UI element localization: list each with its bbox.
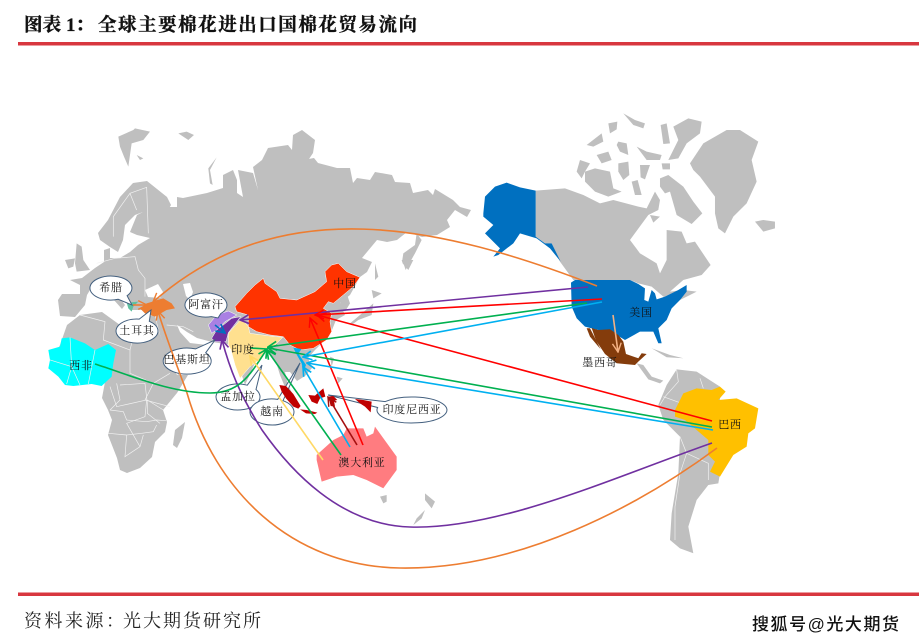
arrow: Australia to Vietnam <box>303 367 350 447</box>
arrow: Australia to Indonesia <box>328 397 357 445</box>
callouts <box>90 276 447 425</box>
label: West Africa: 西非 <box>69 358 93 372</box>
label: Greece: 希腊 <box>99 280 123 294</box>
title: 全球主要棉花进出口国棉花贸易流向 <box>98 14 417 36</box>
callout: Afghanistan <box>185 293 227 318</box>
land: Africa <box>50 312 188 473</box>
bottom red rule <box>18 592 919 596</box>
arrow: West Africa to India <box>95 349 267 393</box>
arrow: USA to Turkey <box>153 229 597 302</box>
land: Central America <box>637 363 663 383</box>
country: China <box>235 263 360 350</box>
country: Indonesia <box>279 385 372 414</box>
country: Brazil <box>675 387 758 477</box>
arrow: Brazil to Vietnam <box>307 363 713 430</box>
country: Mexico <box>587 328 647 365</box>
country labels <box>69 276 742 469</box>
land: Arctic Europe islands and Britain <box>65 128 217 272</box>
arrow: USA to India <box>268 303 587 347</box>
world map base: grey land <box>50 113 775 553</box>
title: 图表 1： <box>24 15 94 36</box>
country: Afghanistan <box>208 311 237 333</box>
watermark: 搜狐号@光大期货 <box>752 615 899 634</box>
land: Madagascar <box>173 422 185 448</box>
label: Afghanistan: 阿富汗 <box>188 297 224 311</box>
country borders <box>80 187 708 540</box>
land: North America <box>536 188 711 300</box>
arrow: Afghanistan to Pakistan <box>215 325 225 333</box>
country: Australia <box>317 427 397 488</box>
source note: 资料来源： <box>24 611 124 631</box>
sea cutouts: Black Sea and Caspian <box>145 283 193 300</box>
arrow: Australia to India <box>267 350 341 455</box>
label: China: 中国 <box>333 276 357 290</box>
land: islands and Greenland <box>577 113 775 358</box>
arrow: USA to China <box>315 299 602 315</box>
label: Mexico: 墨西哥 <box>582 355 618 369</box>
country: Turkey <box>140 298 175 317</box>
callout: Vietnam <box>250 363 300 425</box>
label: Australia: 澳大利亚 <box>338 455 386 469</box>
arrow: Brazil to Pakistan <box>222 340 712 527</box>
arrow: Australia to China <box>310 318 363 445</box>
label: Pakistan: 巴基斯坦 <box>163 352 211 366</box>
source note: 光大期货研究所 <box>123 611 261 631</box>
label: Brazil: 巴西 <box>718 418 742 431</box>
country: Vietnam <box>293 348 306 372</box>
arrow: USA to Vietnam <box>303 302 602 357</box>
country: India <box>228 318 283 378</box>
callout: Bangladesh <box>216 365 262 410</box>
arrow: Greece to Turkey <box>133 304 147 306</box>
arrow: USA to Pakistan <box>240 287 588 320</box>
label: Indonesia: 印度尼西亚 <box>382 402 442 416</box>
label: Turkey: 土耳其 <box>119 323 155 337</box>
land: South America <box>658 369 720 553</box>
label: United States: 美国 <box>629 306 653 319</box>
source note <box>24 611 261 631</box>
arrow: USA to Mexico <box>613 315 618 352</box>
region: West Africa <box>48 337 116 386</box>
land: Eurasia <box>58 130 471 397</box>
trade flow arrows <box>95 229 717 568</box>
callout: Greece <box>90 276 132 305</box>
arrow: Brazil to India <box>268 348 712 427</box>
arrow: Brazil to Turkey <box>158 311 717 568</box>
label: Vietnam: 越南 <box>260 404 284 418</box>
label: Bangladesh: 孟加拉 <box>220 389 256 403</box>
callout: Indonesia <box>328 395 447 423</box>
callout: Pakistan <box>163 340 215 374</box>
top red rule <box>18 42 919 46</box>
callout: Turkey <box>116 310 158 343</box>
arrow: Brazil to China <box>317 315 712 421</box>
country: Pakistan <box>212 317 241 342</box>
land: Japan Korea and Philippines <box>330 260 413 383</box>
country: Greece <box>127 302 138 312</box>
arrow: Pakistan to India <box>250 348 267 349</box>
arrow: Australia to Bangladesh <box>250 356 323 460</box>
land: Sakhalin <box>402 233 422 270</box>
label: India: 印度 <box>231 342 255 356</box>
country: United States <box>483 183 687 343</box>
land: Tasmania and New Zealand <box>380 493 435 525</box>
